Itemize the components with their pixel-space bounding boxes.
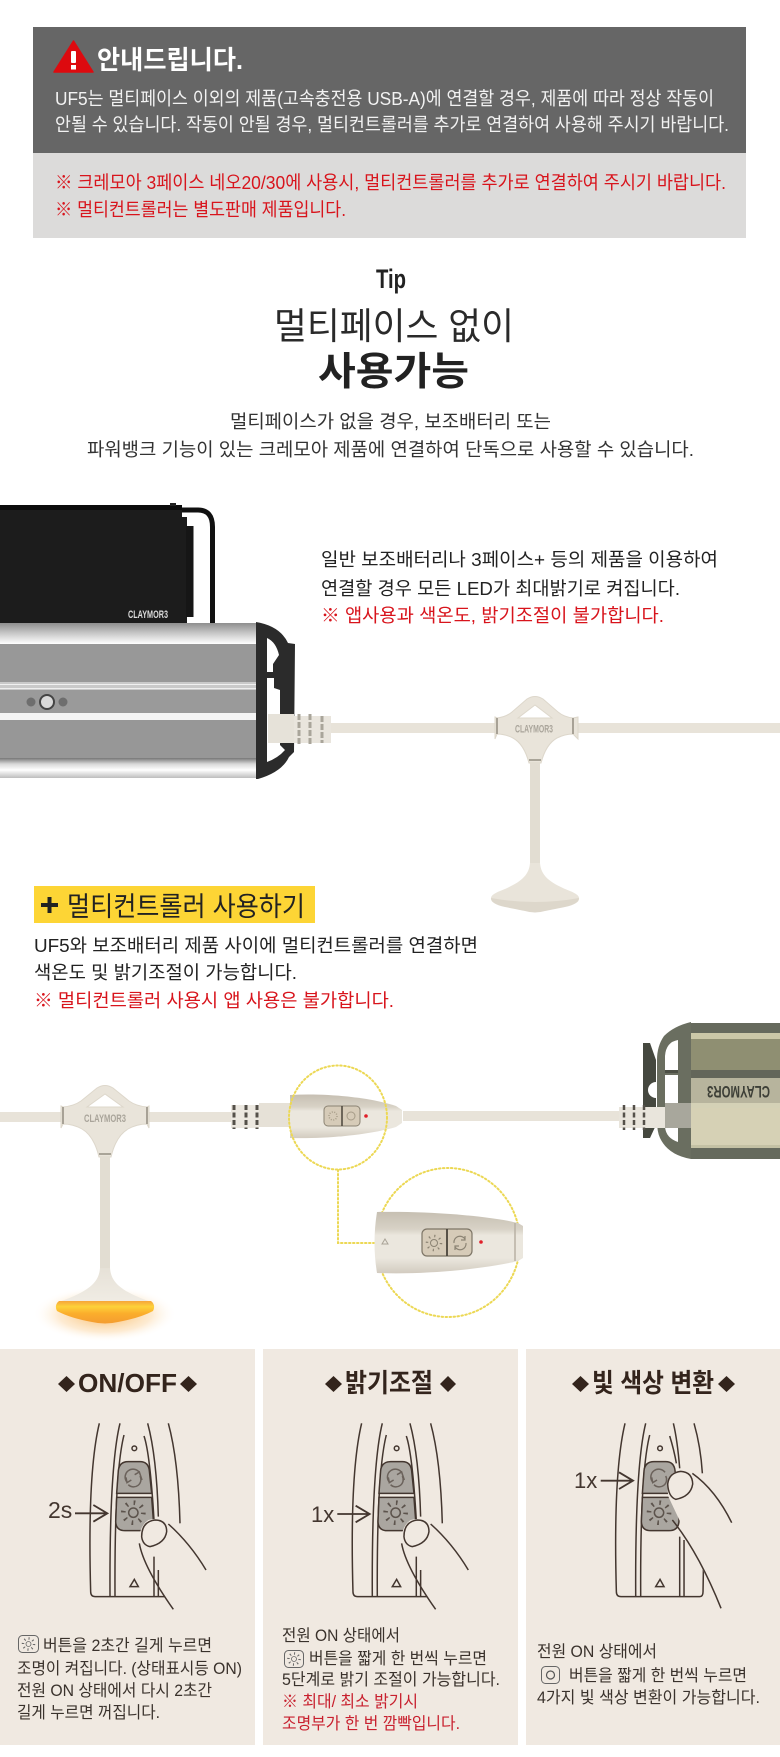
glowing disc <box>56 1301 154 1324</box>
title bold line: 사용가능 <box>318 351 469 394</box>
multi controller description <box>34 935 478 1011</box>
top right description <box>321 549 718 626</box>
glow <box>33 1286 177 1342</box>
description: 조명부가 한 번 깜빡입니다. <box>282 1714 460 1733</box>
led <box>364 1114 368 1118</box>
red warning text <box>55 172 726 220</box>
red warning text: ※ 멀티컨트롤러는 별도판매 제품입니다. <box>55 199 346 220</box>
description: 전원 ON 상태에서 다시 2초간 <box>17 1681 212 1700</box>
illustration: press once <box>337 1423 468 1609</box>
multi controller description: 색온도 및 밝기조절이 가능합니다. <box>34 962 297 983</box>
led <box>479 1240 483 1244</box>
cable <box>331 723 780 733</box>
panel: on/off <box>0 1349 255 1745</box>
panel: brightness <box>263 1349 518 1745</box>
button icon: cycle <box>542 1666 560 1684</box>
icon: warning triangle <box>54 41 93 72</box>
top right description: ※ 앱사용과 색온도, 밝기조절이 불가합니다. <box>321 605 664 626</box>
red warning text: ※ 크레모아 3페이스 네오20/30에 사용시, 멀티컨트롤러를 추가로 연결하여 주시기 바랍니다. <box>55 172 726 193</box>
silver lantern <box>0 622 295 779</box>
arrow label: 1x <box>311 1502 334 1527</box>
stem <box>100 1157 110 1270</box>
title line: 멀티페이스 없이 <box>274 306 514 347</box>
description: 전원 ON 상태에서 <box>282 1626 400 1645</box>
heading text: 멀티컨트롤러 사용하기 <box>67 892 305 922</box>
description <box>17 1636 242 1722</box>
zoomed controller callout <box>374 1168 523 1317</box>
description <box>282 1626 500 1733</box>
handle <box>657 1022 691 1159</box>
red warning panel <box>33 153 746 238</box>
foot <box>59 1268 151 1302</box>
stem <box>530 763 540 867</box>
multi controller heading <box>34 886 315 923</box>
arrow label: 1x <box>574 1468 597 1493</box>
right strain relief <box>619 1105 665 1130</box>
notice body text: UF5는 멀티페이스 이외의 제품(고속충전용 USB-A)에 연결할 경우, 제품에 따라 정상 작동이 <box>55 88 714 109</box>
notice body text: 안될 수 있습니다. 작동이 안될 경우, 멀티컨트롤러를 추가로 연결하여 사용해 주시기 바랍니다. <box>55 114 729 135</box>
hub caps <box>63 1107 147 1154</box>
button icon: sun <box>18 1636 38 1652</box>
usb plug <box>268 714 331 745</box>
cycle button <box>454 1236 466 1250</box>
lower cable and hub <box>0 1086 665 1342</box>
sun button <box>422 1229 472 1256</box>
heading: 밝기조절 <box>345 1368 433 1398</box>
description <box>537 1642 760 1707</box>
intro text <box>87 411 694 460</box>
hub logo: CLAYMOR3 <box>515 724 553 736</box>
triangle mark <box>382 1239 388 1244</box>
dotted small circle <box>289 1066 387 1170</box>
panel: light color change <box>526 1349 780 1745</box>
buttons <box>26 695 68 709</box>
description: 조명이 켜집니다. (상태표시등 ON) <box>17 1659 242 1678</box>
controller body <box>374 1212 523 1273</box>
cable with hub and light <box>268 696 780 912</box>
hub logo: CLAYMOR3 <box>84 1113 126 1125</box>
description: 버튼을 짧게 한 번씩 누르면 <box>569 1666 747 1685</box>
foot <box>491 863 579 912</box>
heading: ON/OFF <box>78 1368 177 1398</box>
description: 5단계로 밝기 조절이 가능합니다. <box>282 1670 500 1689</box>
top right description: 연결할 경우 모든 LED가 최대밝기로 켜집니다. <box>321 578 680 599</box>
hub caps <box>497 718 573 760</box>
handle <box>256 622 295 779</box>
description: 버튼을 짧게 한 번씩 누르면 <box>309 1649 487 1668</box>
multi controller description: UF5와 보조배터리 제품 사이에 멀티컨트롤러를 연결하면 <box>34 935 478 956</box>
top right description: 일반 보조배터리나 3페이스+ 등의 제품을 이용하여 <box>321 549 718 570</box>
description: 길게 누르면 꺼집니다. <box>17 1703 160 1722</box>
logo: CLAYMOR3 <box>128 609 168 621</box>
description: 버튼을 2초간 길게 누르면 <box>43 1636 212 1655</box>
cable to lantern <box>403 1111 620 1121</box>
black lantern <box>0 503 212 623</box>
notice panel <box>33 27 746 153</box>
buttons <box>324 1106 360 1126</box>
left usb plug <box>231 1103 293 1129</box>
description: 4가지 빛 색상 변환이 가능합니다. <box>537 1688 760 1707</box>
notice heading: 안내드립니다. <box>97 45 243 75</box>
intro text: 멀티페이스가 없을 경우, 보조배터리 또는 <box>230 411 551 432</box>
description: 전원 ON 상태에서 <box>537 1642 657 1661</box>
hub <box>61 1086 149 1157</box>
logo rotated: CLAYMOR3 <box>707 1082 770 1101</box>
clip <box>643 1043 656 1138</box>
description: ※ 최대/ 최소 밝기시 <box>282 1692 418 1711</box>
olive lantern <box>643 1022 780 1159</box>
hub <box>495 696 578 763</box>
tip label: Tip <box>376 264 406 294</box>
illustration: press 2s <box>75 1423 206 1609</box>
left cable <box>0 1112 232 1122</box>
intro text: 파워뱅크 기능이 있는 크레모아 제품에 연결하여 단독으로 사용할 수 있습니다. <box>87 439 694 460</box>
plus sign <box>41 897 58 913</box>
title block <box>274 264 514 394</box>
notice body text <box>55 88 729 135</box>
arrow label: 2s <box>48 1497 72 1523</box>
illustration: press color button <box>601 1423 732 1608</box>
multi controller description: ※ 멀티컨트롤러 사용시 앱 사용은 불가합니다. <box>34 990 394 1011</box>
heading: 빛 색상 변환 <box>592 1368 714 1398</box>
button icon: sun <box>284 1650 304 1668</box>
controller small <box>290 1095 402 1138</box>
dotted connector <box>338 1170 376 1243</box>
